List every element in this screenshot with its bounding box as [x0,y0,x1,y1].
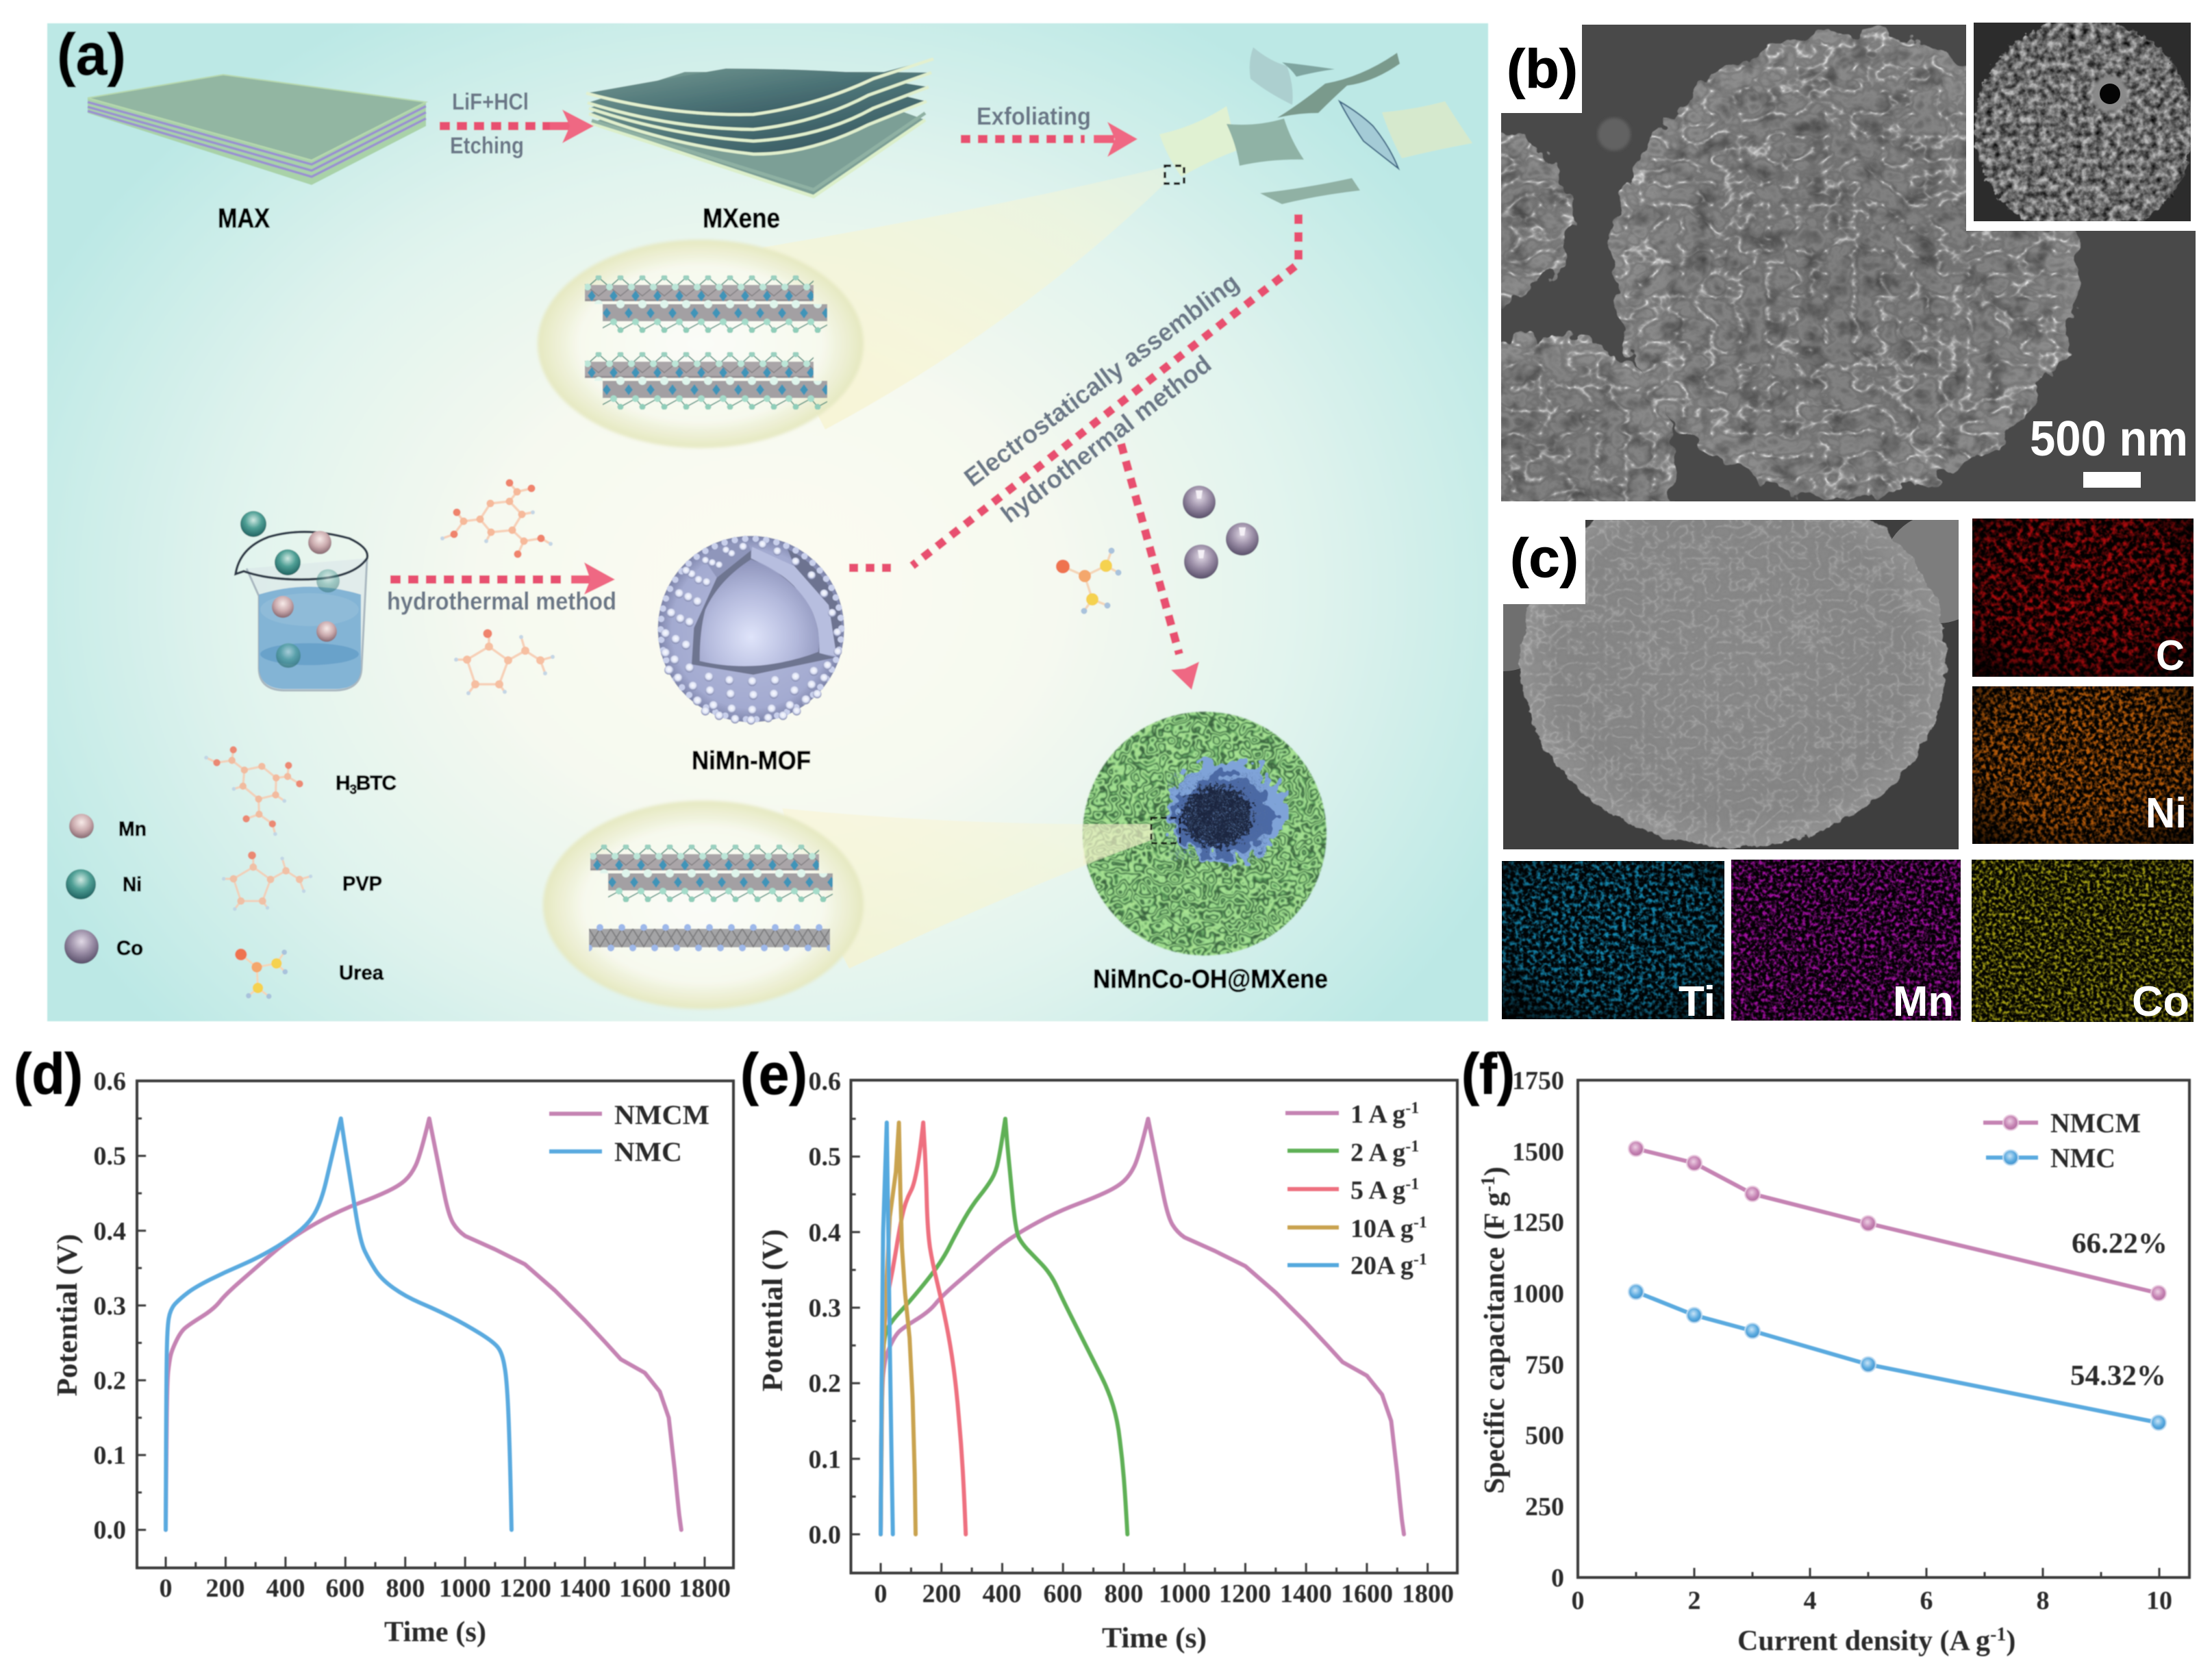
x axis tick labels: 800 [1104,1580,1144,1608]
axis titles: Time (s) [1102,1623,1207,1654]
magnified MXene lattice [538,240,864,448]
urea molecule [1056,548,1122,614]
panel label (a): (a) [57,22,126,88]
MAX layered block [88,75,426,185]
x axis tick labels: 1400 [1280,1580,1332,1608]
y axis tick labels: 1250 [1512,1208,1564,1237]
chart frame and ticks [851,1080,1457,1573]
scale bar 500 nm [2030,412,2188,488]
y axis tick labels: 1000 [1512,1280,1564,1308]
y axis tick labels: 0.4 [808,1219,841,1247]
legend (e): -1 [1413,1251,1427,1269]
y axis tick labels: 0.6 [808,1067,841,1096]
x axis tick labels: 1200 [1219,1580,1271,1608]
x axis tick labels: 200 [205,1574,245,1603]
legend: organic reagents: Urea [339,962,384,984]
arrow down to product [1121,444,1199,690]
MXene stacked sheets [586,59,933,197]
y axis tick labels: 250 [1525,1493,1564,1521]
x axis tick labels: 6 [1920,1586,1933,1615]
axis titles: Specific capacitance (F g [1479,1192,1511,1494]
legend (e): -1 [1405,1138,1419,1156]
lower zoom cone [782,808,1155,969]
hydrothermal label on route: hydrothermal method [996,350,1216,528]
cobalt ions [1183,486,1259,579]
y axis tick labels: 750 [1525,1351,1564,1380]
y axis tick labels: 1750 [1512,1066,1564,1095]
axis titles [757,1229,1207,1654]
x axis tick labels: 400 [266,1574,305,1603]
series: NMCM [1629,1141,2166,1301]
legend (e): 20A g [1350,1251,1413,1280]
axis titles: -1 [1478,1176,1499,1192]
legend: organic reagents: BTC [356,772,397,795]
x axis tick labels [874,1580,1454,1608]
panel label (c): (c) [1510,527,1579,588]
curve: NMCM [166,1119,681,1530]
panel (a): synthesis schematic [47,22,1488,1021]
H3BTC molecule above arrow [440,479,553,558]
panel label (f): (f) [1461,1042,1515,1106]
magnified composite lattice [543,801,864,1009]
y axis tick labels: 0.1 [808,1445,841,1474]
MAX label: MAX [218,203,270,234]
x axis tick labels: 600 [326,1574,364,1603]
x axis tick labels: 4 [1804,1586,1816,1615]
EDS map Ni: Ni [2146,790,2187,837]
SEM inset with hollow sphere [1966,23,2196,231]
x axis tick labels [159,1574,731,1603]
exfoliating label: Exfoliating [977,102,1091,130]
legend: metal ions [64,814,147,964]
hydrothermal method label: hydrothermal method [387,587,616,615]
x axis tick labels: 0 [874,1580,888,1608]
retention labels: 66.22% [2072,1228,2167,1260]
magnified area marker [1165,166,1184,184]
y axis tick labels: 1500 [1512,1138,1564,1166]
scale bar 500 nm: 500 nm [2030,412,2188,466]
NiMn-MOF hollow sphere [658,536,844,725]
x axis tick labels: 10 [2146,1586,2172,1615]
upper zoom cone [763,167,1166,429]
EDS map C: C [2156,632,2185,679]
legend (f): NMC [2050,1143,2115,1173]
x axis tick labels: 1000 [1159,1580,1211,1608]
legend (e): 5 A g [1350,1176,1405,1205]
panel (b): SEM image [1501,23,2196,501]
SEM sphere for mapping [1503,520,1959,849]
legend: metal ions: Co [116,937,143,960]
EDS map Ti: Ti [1679,978,1715,1025]
legend: organic reagents: PVP [342,873,382,895]
x axis tick labels: 0 [159,1574,173,1603]
x axis tick labels [1571,1586,2172,1615]
panel label (b) [1501,25,1582,113]
series: NMC [1629,1284,2166,1430]
legend (e): -1 [1413,1214,1427,1232]
y axis tick labels: 0.1 [93,1441,126,1470]
y axis tick labels: 0.3 [93,1292,126,1321]
x axis tick labels: 800 [386,1574,425,1603]
PVP molecule below arrow [454,629,555,695]
y axis tick labels: 0 [1551,1564,1564,1593]
x axis tick labels: 2 [1687,1586,1701,1615]
axis titles: -1 [1990,1624,2006,1645]
y axis tick labels: 0.3 [808,1294,841,1323]
EDS map Mn: Mn [1893,978,1954,1025]
y axis tick labels: 0.0 [93,1516,126,1545]
panel label (e): (e) [740,1042,807,1106]
arrow: hydrothermal [390,562,615,595]
EDS map Mn [1731,860,1961,1025]
panel (c): SEM and EDS maps [1502,519,2194,1022]
chart frame and ticks [1578,1080,2189,1577]
y axis tick labels [808,1067,841,1549]
EDS map C [1972,519,2194,679]
arrow: exfoliating [961,122,1138,157]
dashed route to assembly [912,214,1298,566]
x axis tick labels: 200 [922,1580,962,1608]
NiMn-MOF label: NiMn-MOF [692,747,811,775]
legend (e): 10A g [1350,1214,1413,1243]
MXene label: MXene [703,203,780,234]
EDS map Co: Co [2132,978,2189,1025]
product label: NiMnCo-OH@MXene [1093,965,1328,994]
legend (e): 1 A g [1350,1100,1405,1129]
legend (f) [1983,1108,2141,1173]
legend: organic reagents: H [336,772,351,795]
y axis tick labels [1512,1066,1564,1593]
electrostatic assembling label: Electrostatically assembling [959,268,1244,492]
beaker with metal ions [236,511,367,690]
cut-out highlight [1083,824,1152,864]
arrow: LiF+HCl etching [440,110,594,143]
legend (d): NMC [614,1136,682,1167]
legend: metal ions: Mn [118,818,147,840]
panel label (b): (b) [1507,38,1578,99]
product area marker [1151,818,1180,843]
axis titles: ) [2006,1625,2015,1657]
panel (d): GCD NMCM vs NMC [14,1042,733,1648]
x axis tick labels: 600 [1044,1580,1082,1608]
x axis tick labels: 1200 [499,1574,551,1603]
legend (d) [549,1099,709,1167]
chart frame and ticks [137,1081,733,1568]
legend: metal ions: Ni [123,873,142,896]
MOF dashed link [849,564,898,572]
curve: NMC [166,1119,512,1530]
axis titles: Time (s) [384,1617,486,1648]
y axis tick labels: 500 [1525,1421,1564,1450]
EDS map Co [1972,860,2194,1025]
y axis tick labels: 0.0 [808,1521,841,1549]
legend (d): NMCM [614,1099,709,1130]
x axis tick labels: 1000 [439,1574,491,1603]
y axis tick labels: 0.6 [93,1067,126,1096]
y axis tick labels [93,1067,126,1545]
NiMnCo-OH@MXene sphere [1083,712,1327,956]
y axis tick labels: 0.5 [808,1143,841,1171]
axis titles: ) [1479,1166,1511,1176]
legend (e) [1285,1099,1427,1280]
legend (f): NMCM [2050,1108,2141,1138]
EDS map Ti [1502,861,1724,1025]
axis titles [1478,1166,2015,1657]
y axis tick labels: 0.4 [93,1217,126,1246]
panel label (d): (d) [14,1042,83,1106]
EDS map Ni [1972,686,2194,844]
x axis tick labels: 1800 [679,1574,731,1603]
etching labels [450,89,529,159]
legend (e): -1 [1405,1099,1419,1117]
axis titles: Current density (A g [1737,1625,1990,1657]
x axis tick labels: 0 [1571,1586,1585,1615]
legend: organic reagents [192,716,397,1006]
panel (f): rate capability [1461,1042,2189,1657]
legend (e): 2 A g [1350,1138,1405,1167]
axis titles: Potential (V) [52,1234,84,1396]
x axis tick labels: 400 [982,1580,1022,1608]
retention labels: 54.32% [2070,1360,2166,1392]
x axis tick labels: 8 [2037,1586,2049,1615]
panel (e): GCD at current densities [740,1042,1457,1654]
y axis tick labels: 0.5 [93,1142,126,1171]
axis titles [52,1234,486,1648]
legend (e): -1 [1405,1175,1419,1193]
retention labels [2070,1228,2167,1392]
y axis tick labels: 0.2 [93,1367,126,1395]
panel label (c) [1503,520,1585,604]
y axis tick labels: 0.2 [808,1369,841,1398]
x axis tick labels: 1400 [559,1574,611,1603]
exfoliated MXene flakes [1159,47,1472,204]
x axis tick labels: 1600 [1341,1580,1393,1608]
x axis tick labels: 1800 [1402,1580,1454,1608]
curves by current density [881,1119,1404,1534]
etching labels: LiF+HCl [452,89,529,115]
x axis tick labels: 1600 [619,1574,671,1603]
legend: organic reagents: 3 [349,783,357,797]
etching labels: Etching [450,133,524,159]
axis titles: Potential (V) [757,1230,789,1391]
